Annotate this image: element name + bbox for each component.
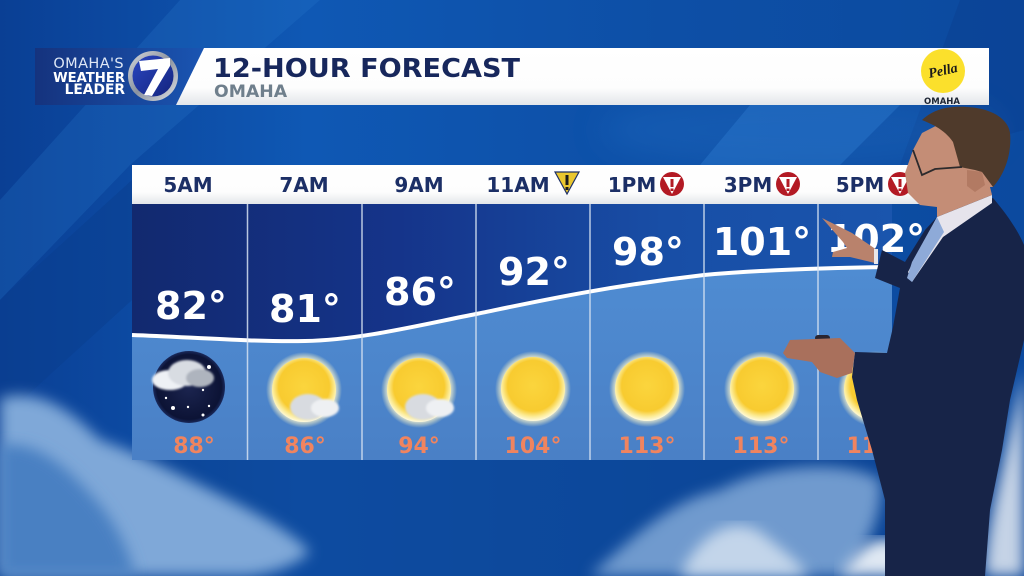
- icon: mostly sunny 7AM: [266, 352, 342, 428]
- upper temperature area: [132, 204, 892, 340]
- hour labels: 11AM: [486, 173, 550, 197]
- icon: sunny 5PM: [838, 351, 914, 427]
- icon: sunny 1PM: [609, 351, 685, 427]
- clouds: bottom centre and right: [590, 370, 1024, 576]
- tagline: WEATHER: [53, 71, 125, 86]
- icon: red warning 3PM: [776, 172, 800, 196]
- tagline: LEADER: [65, 82, 125, 98]
- hour labels: 9AM: [394, 173, 444, 197]
- feels-like temperatures: 113°: [847, 434, 903, 459]
- forecast table: [132, 165, 932, 460]
- lower third banner: [35, 48, 989, 107]
- icon: red warning 5PM: [888, 172, 912, 196]
- presenter: [783, 107, 1024, 576]
- icon: red warning 1PM: [660, 172, 684, 196]
- shirt and tie: [907, 195, 992, 282]
- tagline: OMAHA'S: [53, 56, 124, 72]
- title panel: [176, 48, 989, 105]
- title: 12-HOUR FORECAST: [213, 54, 521, 84]
- sponsor logo: Pella: [927, 61, 959, 82]
- temperatures: 98°: [612, 230, 684, 274]
- temperatures: 82°: [155, 284, 227, 328]
- column dividers: [248, 204, 818, 460]
- location: OMAHA: [214, 82, 288, 102]
- feels-like temperatures: 113°: [619, 434, 675, 459]
- glasses: [913, 150, 962, 175]
- tagline: [53, 56, 125, 98]
- ear: [967, 170, 985, 192]
- feels-like temperatures: 88°: [173, 434, 215, 459]
- temperatures: 81°: [269, 287, 341, 331]
- icon: channel 7 logo: [128, 51, 178, 101]
- lower feels-like area: [132, 267, 892, 460]
- temperatures: [155, 217, 925, 331]
- hour labels: [163, 173, 884, 197]
- pointing hand: [822, 218, 878, 264]
- feels-like temperatures: 86°: [284, 434, 326, 459]
- icon: mostly sunny 9AM: [381, 352, 457, 428]
- hour labels: 7AM: [279, 173, 329, 197]
- hour labels: 1PM: [608, 173, 656, 197]
- sponsor logo: [921, 49, 965, 107]
- sponsor logo: OMAHA: [924, 97, 960, 107]
- temperatures: 102°: [827, 217, 925, 261]
- hair: [922, 107, 1010, 187]
- header bar: [132, 165, 932, 204]
- icon: yellow caution: [555, 172, 579, 194]
- icon: sunny 3PM: [724, 351, 800, 427]
- hour labels: 5PM: [836, 173, 884, 197]
- temperature curve: [132, 267, 892, 341]
- temperatures: 86°: [384, 270, 456, 314]
- temperatures: 101°: [713, 220, 811, 264]
- temperatures: 92°: [498, 250, 570, 294]
- icon: sunny 11AM: [495, 351, 571, 427]
- feels-like temperatures: 94°: [398, 434, 440, 459]
- lower hand with clicker: [783, 335, 855, 378]
- feels-like temperatures: 104°: [505, 434, 561, 459]
- feels-like temperatures: 113°: [733, 434, 789, 459]
- hour labels: 5AM: [163, 173, 213, 197]
- hour labels: 3PM: [724, 173, 772, 197]
- icon: night partly cloudy: [152, 351, 225, 423]
- station logo block: [35, 48, 210, 105]
- suit body: [852, 198, 1024, 576]
- clouds: bottom left: [0, 396, 310, 576]
- neck and head: [905, 110, 1000, 217]
- feels-like temperatures: [173, 434, 903, 459]
